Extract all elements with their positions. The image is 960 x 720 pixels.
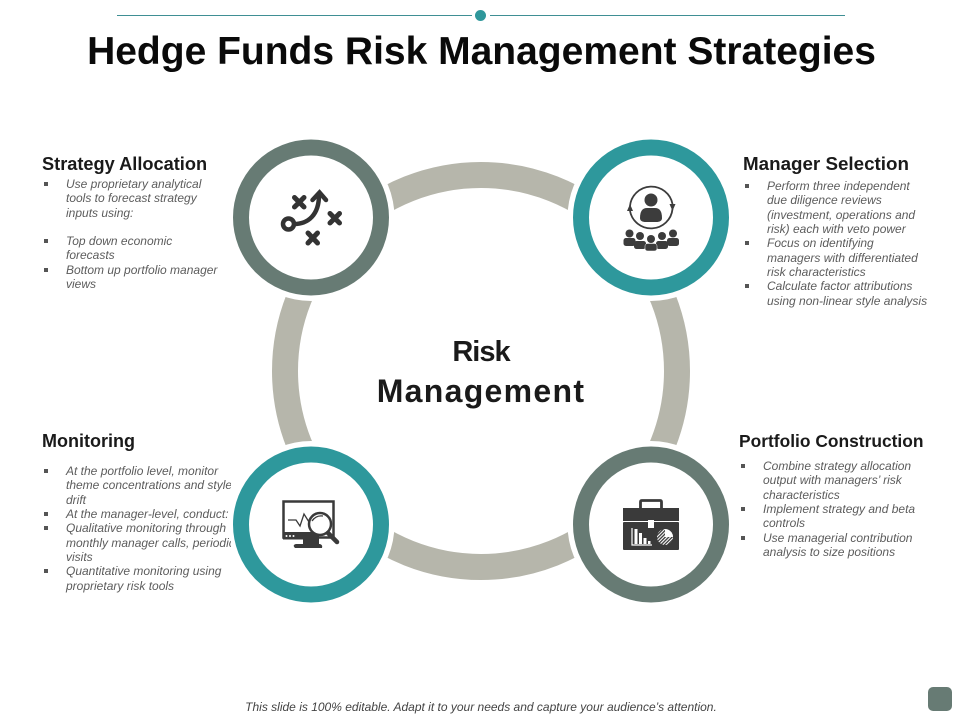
icon: play diagram [283, 192, 340, 243]
text: manager selection: using non-linear style analysis [767, 294, 927, 308]
center label: Risk [452, 336, 510, 368]
text: strategy allocation [44, 177, 218, 291]
center label [377, 336, 585, 409]
central ring [285, 175, 677, 567]
small rounded square [928, 687, 952, 711]
text: manager selection: Calculate factor attributions [767, 279, 912, 293]
text: manager selection: Perform three independent [767, 179, 910, 193]
text: portfolio construction [741, 459, 915, 559]
circle: monitoring [228, 441, 394, 608]
circle: strategy allocation [228, 134, 394, 301]
heading: strategy allocation: Strategy Allocation [42, 154, 207, 174]
text: portfolio construction: Implement strategy and beta [763, 502, 915, 516]
text: manager selection: risk) each with veto power [767, 222, 906, 236]
text: strategy allocation: tools to forecast strategy [66, 191, 197, 205]
text: strategy allocation: Bottom up portfolio manager [66, 263, 217, 277]
text: portfolio construction: controls [763, 516, 805, 530]
text: portfolio construction: characteristics [763, 488, 840, 502]
heading: monitoring: Monitoring [42, 431, 135, 451]
text: portfolio construction: analysis to size positions [763, 545, 895, 559]
heading: manager selection: Manager Selection [743, 153, 909, 174]
text: monitoring: theme concentrations and style [66, 478, 231, 492]
text: monitoring: monthly manager calls, periodic [66, 536, 231, 550]
text: monitoring: drift [66, 493, 86, 507]
text: monitoring: proprietary risk tools [66, 579, 174, 593]
text: manager selection: due diligence reviews [767, 193, 882, 207]
text: strategy allocation: Top down economic [66, 234, 172, 248]
text: monitoring: At the manager-level, conduct: [66, 507, 229, 521]
icon: monitor with magnifier [283, 502, 337, 548]
text: monitoring: At the portfolio level, monitor [66, 464, 218, 478]
heading: portfolio construction: Portfolio Construction [739, 431, 924, 451]
text: manager selection [745, 179, 927, 308]
text: portfolio construction: Use managerial contribution [763, 531, 912, 545]
footer note: This slide is 100% editable. Adapt it to your needs and capture your audience’s attention. [245, 700, 717, 714]
text: monitoring [44, 464, 231, 593]
top decoration line with dot [117, 10, 845, 21]
text: monitoring: Quantitative monitoring using [66, 564, 221, 578]
text: strategy allocation: Use proprietary analytical [66, 177, 201, 191]
text: portfolio construction: Combine strategy allocation [763, 459, 911, 473]
icon: briefcase with charts [623, 500, 679, 550]
text: manager selection: Focus on identifying [767, 236, 874, 250]
text: portfolio construction: output with managers’ risk [763, 473, 902, 487]
text: manager selection: (investment, operations and [767, 208, 915, 222]
center label: Management [377, 373, 585, 409]
text: manager selection: managers with differentiated [767, 251, 918, 265]
title: Hedge Funds Risk Management Strategies [87, 30, 876, 73]
icon: manager and team [624, 187, 679, 251]
text: monitoring: visits [66, 550, 93, 564]
circle: portfolio construction [568, 441, 734, 608]
text: strategy allocation: inputs using: [66, 206, 133, 220]
text: monitoring: Qualitative monitoring through [66, 521, 226, 535]
circle: manager selection [568, 134, 734, 301]
text: strategy allocation: views [66, 277, 96, 291]
text: strategy allocation: forecasts [66, 248, 115, 262]
text: manager selection: risk characteristics [767, 265, 866, 279]
